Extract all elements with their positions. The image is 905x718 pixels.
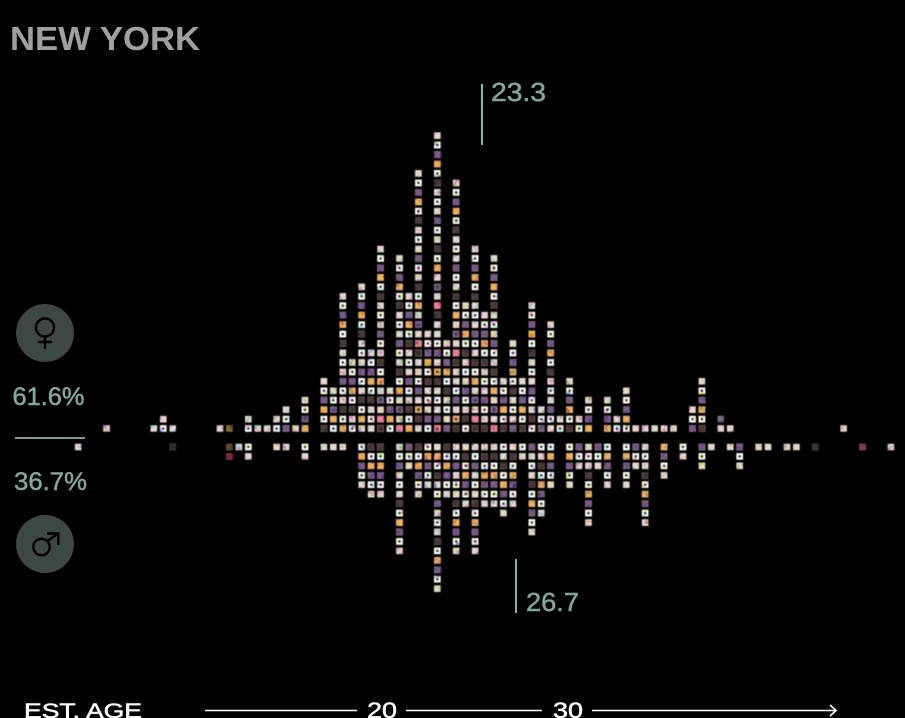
axis: age arrow with ticks bbox=[205, 705, 836, 716]
histogram: male photos below the baseline bbox=[78, 416, 891, 592]
title: NEW YORK bbox=[10, 20, 200, 57]
histogram: female photos above the baseline bbox=[107, 132, 730, 432]
label: female average age: 23.3 bbox=[491, 77, 546, 107]
divider between shares bbox=[15, 437, 85, 439]
icon: female symbol bbox=[16, 304, 74, 362]
marker: male average age line bbox=[515, 559, 517, 613]
label: male average age: 26.7 bbox=[526, 587, 579, 617]
icon: male symbol bbox=[16, 515, 74, 573]
marker: female average age line bbox=[481, 84, 483, 145]
label: male share: 36.7% bbox=[14, 468, 87, 496]
label: female share: 61.6% bbox=[12, 383, 84, 411]
